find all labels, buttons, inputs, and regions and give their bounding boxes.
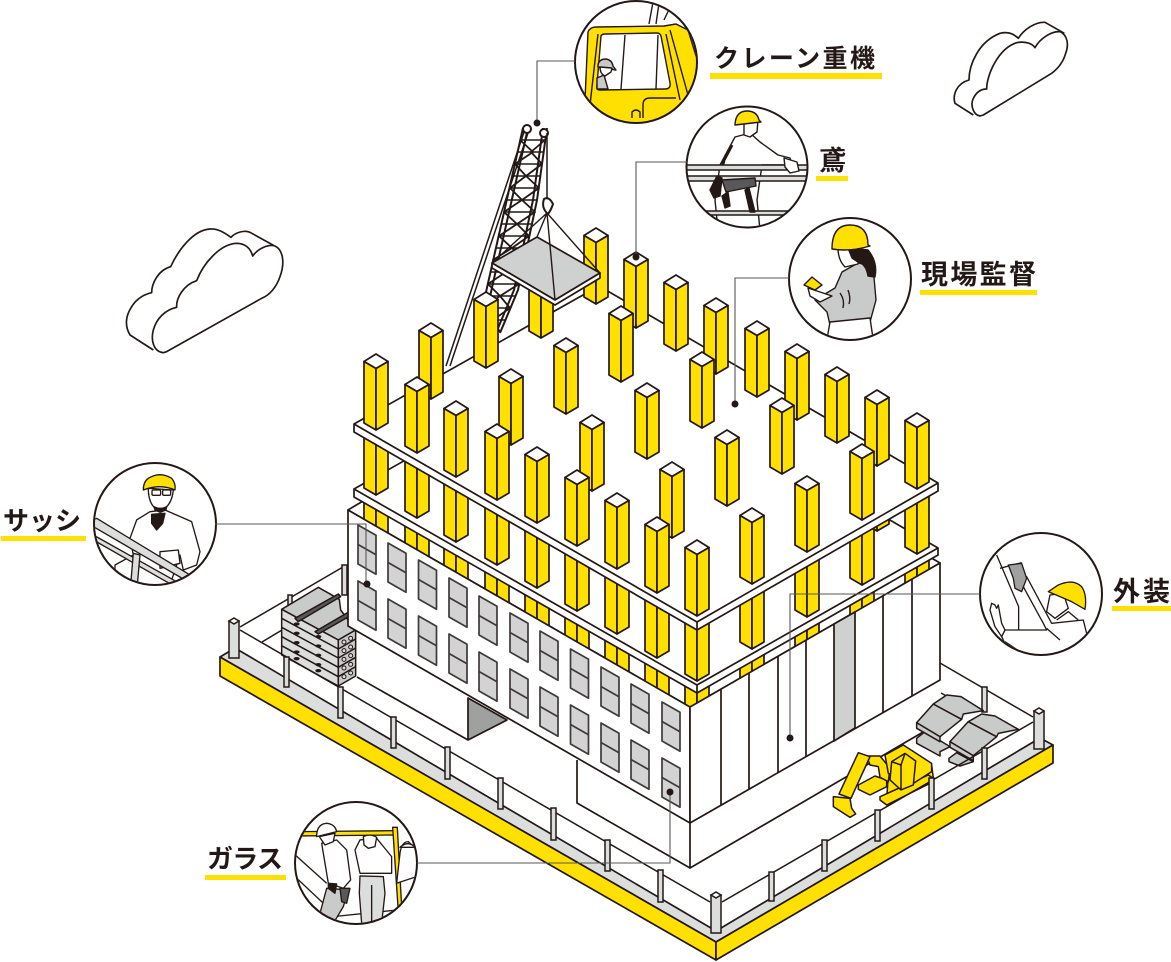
crane boom [446, 125, 548, 366]
circle: site supervisor [789, 218, 911, 345]
label: crane: クレーン重機 [714, 45, 875, 73]
suspended concrete slab with hook [492, 133, 600, 305]
slab: lower floor edge [354, 489, 938, 693]
label: scaffold worker: 鳶 [819, 146, 846, 176]
lower building volume [357, 677, 930, 868]
leader: scaffold worker [632, 162, 687, 260]
slab: upper floor edge [354, 424, 938, 630]
circle: glass workers [293, 802, 417, 924]
label: sash: サッシ [3, 506, 81, 536]
leader: sash [215, 524, 370, 588]
stacked concrete blocks [282, 587, 356, 686]
roof and third tier of columns [348, 365, 940, 746]
top tier of columns [364, 228, 929, 616]
excavator [833, 745, 933, 817]
back fence [240, 565, 1033, 717]
label: exterior: 外装 [1113, 577, 1170, 607]
fence: front sides [229, 618, 1044, 933]
circle: crane operator [574, 0, 698, 124]
label: supervisor: 現場監督 [921, 260, 1036, 290]
cloud: right [954, 22, 1067, 116]
circle: sash worker [93, 463, 216, 586]
second tier of columns [364, 388, 929, 681]
cloud: left [126, 229, 283, 353]
site base [220, 648, 1053, 960]
slab: lower floor [354, 351, 938, 693]
leader: exterior [786, 594, 980, 742]
circle: scaffold worker [686, 106, 808, 230]
building wall: windows side [348, 510, 690, 823]
leader: supervisor [732, 278, 789, 408]
building wall: exterior panels side [690, 563, 940, 868]
leader: glass [417, 788, 674, 863]
label: glass: ガラス [207, 844, 283, 874]
slab: upper floor [354, 286, 938, 630]
leader: crane [534, 61, 575, 126]
gray road plates [917, 695, 1018, 766]
circle: exterior worker [980, 533, 1102, 660]
